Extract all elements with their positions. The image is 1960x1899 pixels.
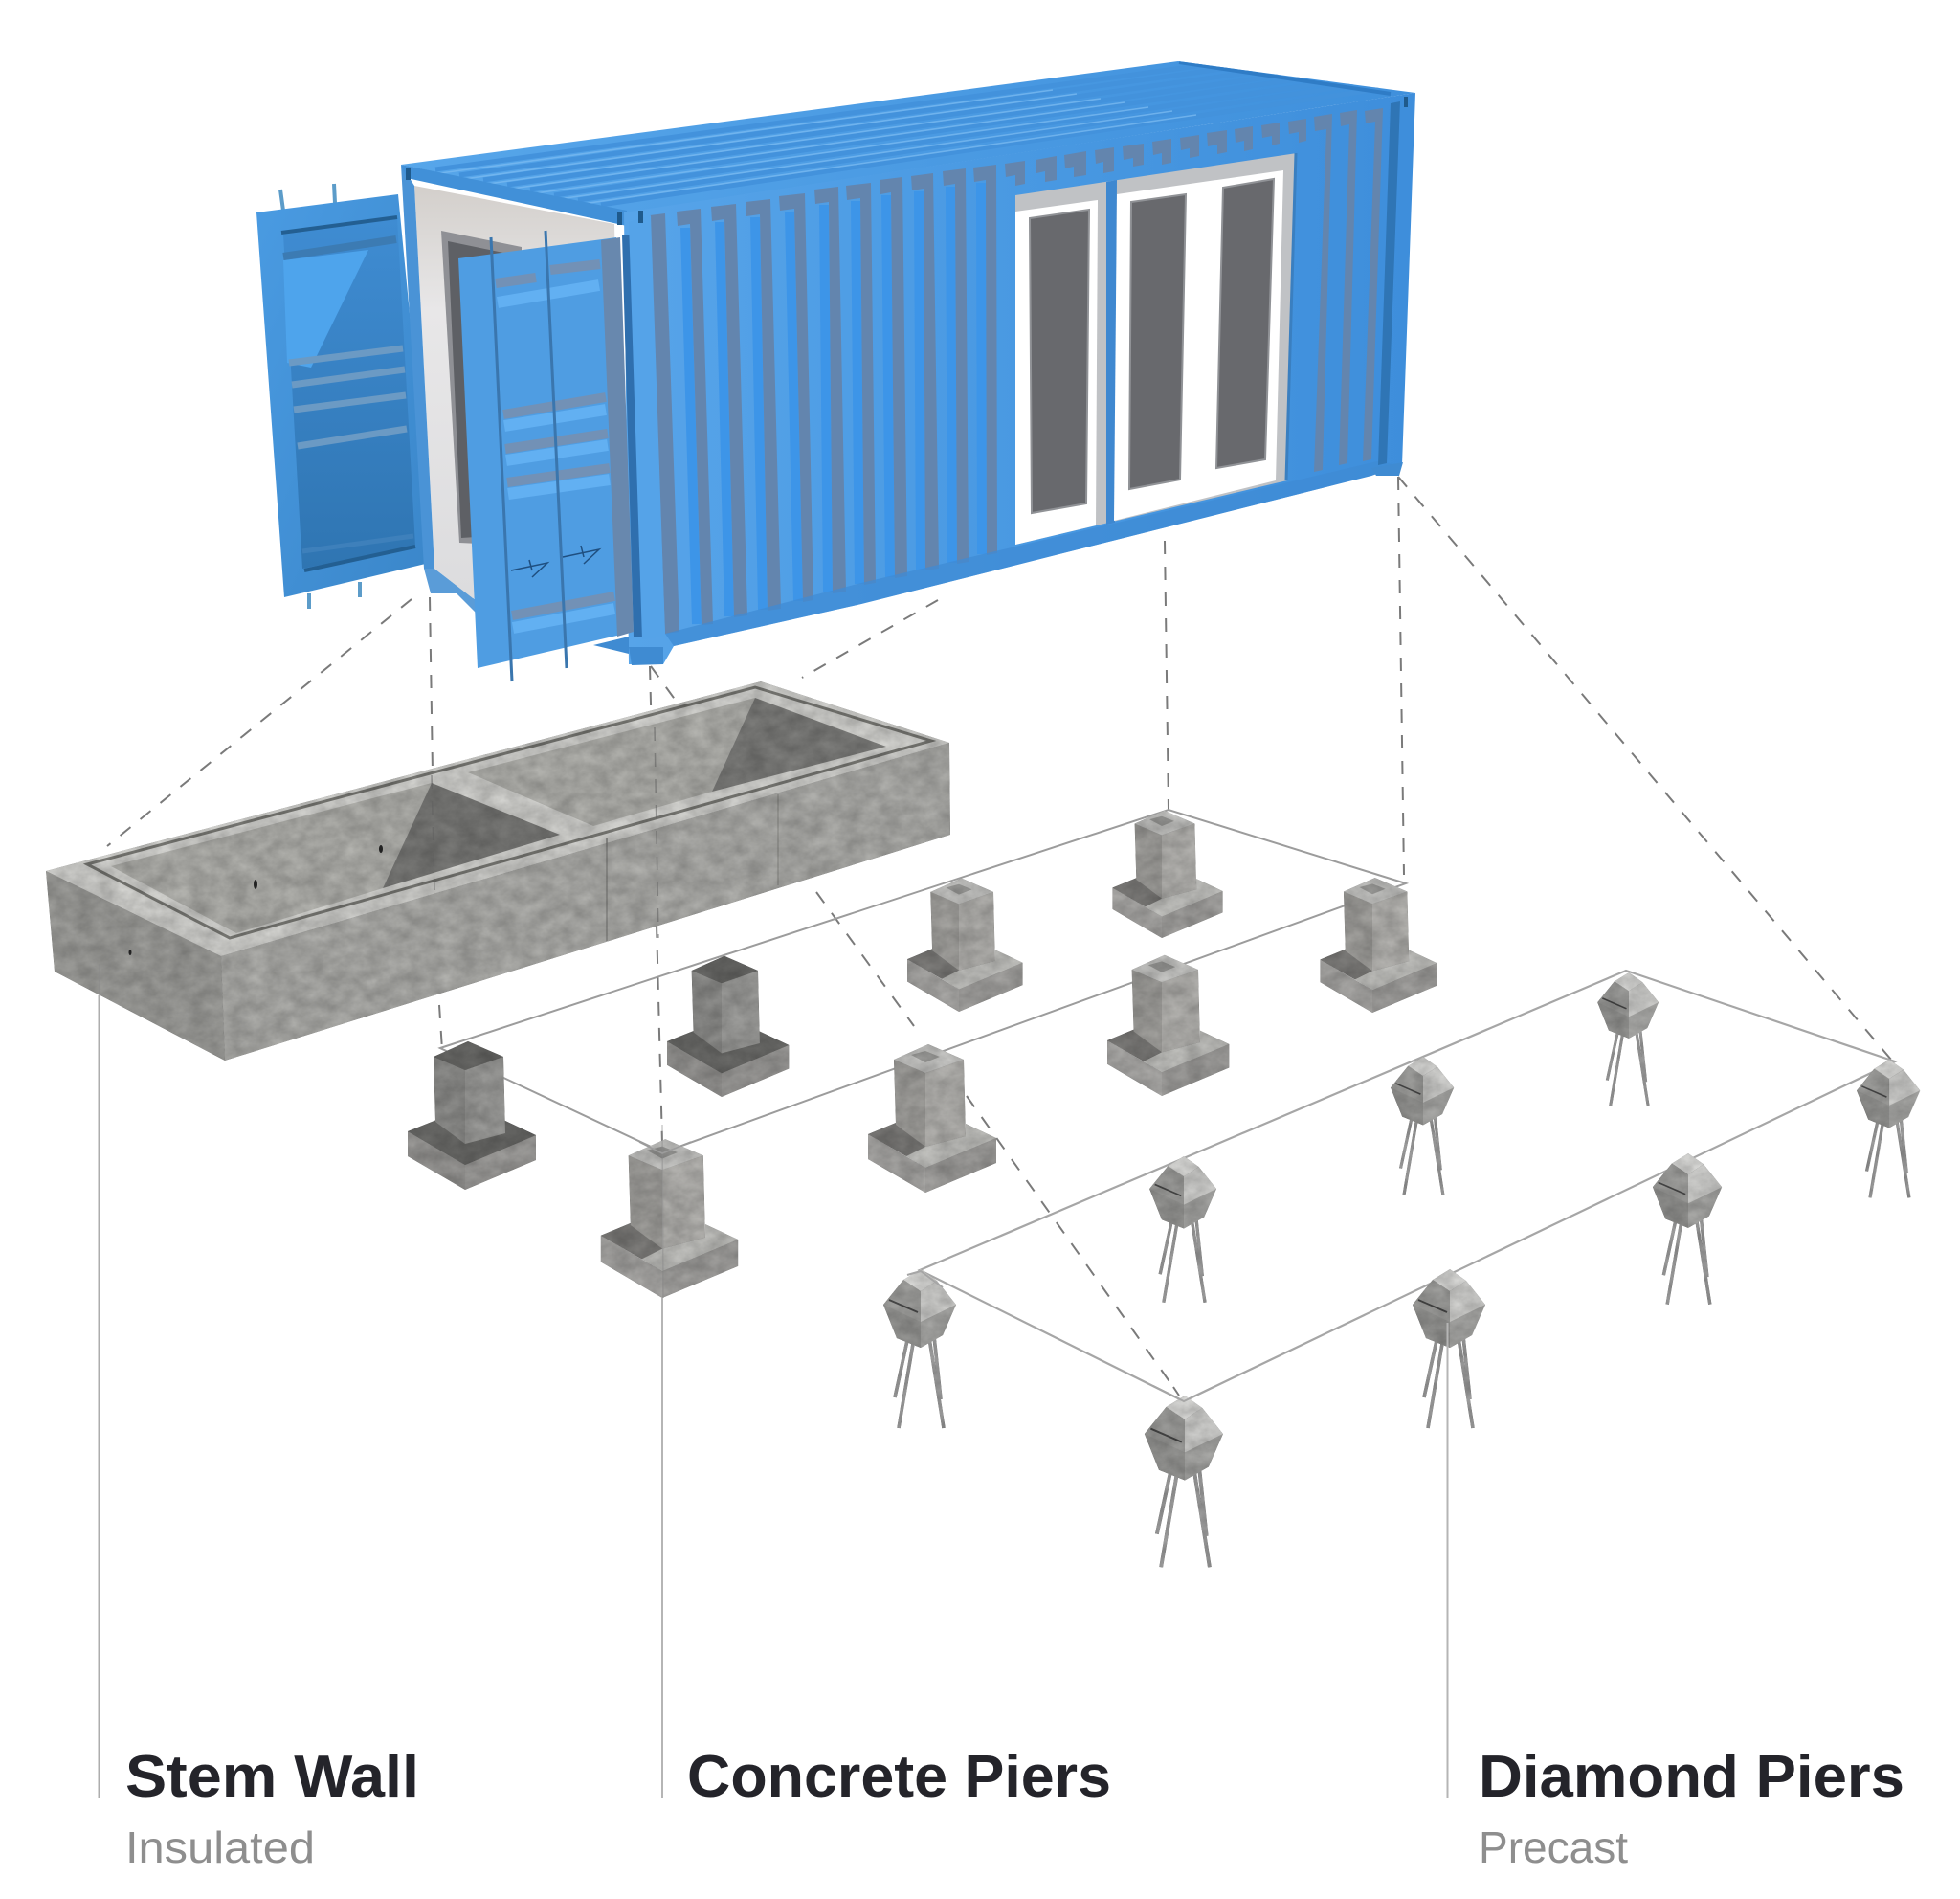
cell one xyxy=(111,783,560,933)
diamond pier layout xyxy=(883,972,1920,1567)
leader line: diamond piers xyxy=(1447,1323,1449,1798)
door logos xyxy=(511,546,599,577)
corrugation stripes xyxy=(650,108,1383,634)
guide on front pier xyxy=(639,1125,691,1298)
door base xyxy=(593,637,629,654)
dashed guide lines xyxy=(107,477,1891,1387)
diamond pier 3 xyxy=(1597,972,1659,1106)
stem wall foundation xyxy=(46,681,950,1061)
pier 6 xyxy=(1107,955,1229,1096)
diamond pier 1 xyxy=(883,1269,956,1428)
diamond pier 7 xyxy=(1413,1269,1485,1428)
wall outer faces xyxy=(46,871,225,1061)
pier 1 xyxy=(408,1041,536,1190)
pier 3 xyxy=(601,1139,738,1298)
diamond pier outline xyxy=(920,971,1895,1401)
pier 8 xyxy=(1320,878,1437,1013)
sliding door panel left xyxy=(1015,200,1098,545)
diamond pier 4 xyxy=(1857,1060,1920,1197)
container interior xyxy=(401,165,622,613)
diamond pier 2 xyxy=(1391,1057,1454,1195)
container roof xyxy=(401,61,1415,226)
concrete pier layout xyxy=(408,811,1437,1298)
bright stripes xyxy=(685,183,982,624)
door mullion xyxy=(1106,180,1117,525)
bottom rail xyxy=(665,461,1399,646)
label: concrete piers: Concrete Piers xyxy=(687,1744,1111,1810)
diamond pier 8 xyxy=(1145,1396,1223,1567)
sliding door panels right xyxy=(1114,170,1283,521)
cell two xyxy=(468,698,886,826)
door panel ribs xyxy=(498,285,614,628)
guide over diamond corners xyxy=(907,1271,1214,1401)
diamond pier 5 xyxy=(1149,1156,1216,1303)
diamond pier 6 xyxy=(1653,1153,1722,1305)
label: diamond piers xyxy=(1479,1744,1904,1872)
label: stem wall: Stem Wall xyxy=(125,1744,419,1810)
closed front door xyxy=(458,231,634,681)
shipping container xyxy=(256,61,1415,681)
corner post xyxy=(622,235,643,637)
open left door xyxy=(256,184,434,609)
end post xyxy=(1378,101,1400,465)
leader line: concrete piers xyxy=(661,1298,663,1798)
container side wall xyxy=(617,93,1415,665)
pier 5 xyxy=(907,879,1023,1012)
label: diamond piers: Diamond Piers xyxy=(1479,1744,1904,1810)
door opening xyxy=(1015,153,1297,545)
label: stem wall: Insulated xyxy=(125,1822,315,1872)
faint guides over wall xyxy=(432,727,658,938)
label: diamond piers: Precast xyxy=(1479,1822,1628,1872)
pier 4 xyxy=(868,1044,996,1193)
label: stem wall xyxy=(125,1744,419,1872)
pier 2 xyxy=(667,956,789,1097)
concrete pier outline xyxy=(440,810,1406,1152)
pier 7 xyxy=(1112,811,1223,938)
leader line: stem wall xyxy=(98,964,100,1798)
